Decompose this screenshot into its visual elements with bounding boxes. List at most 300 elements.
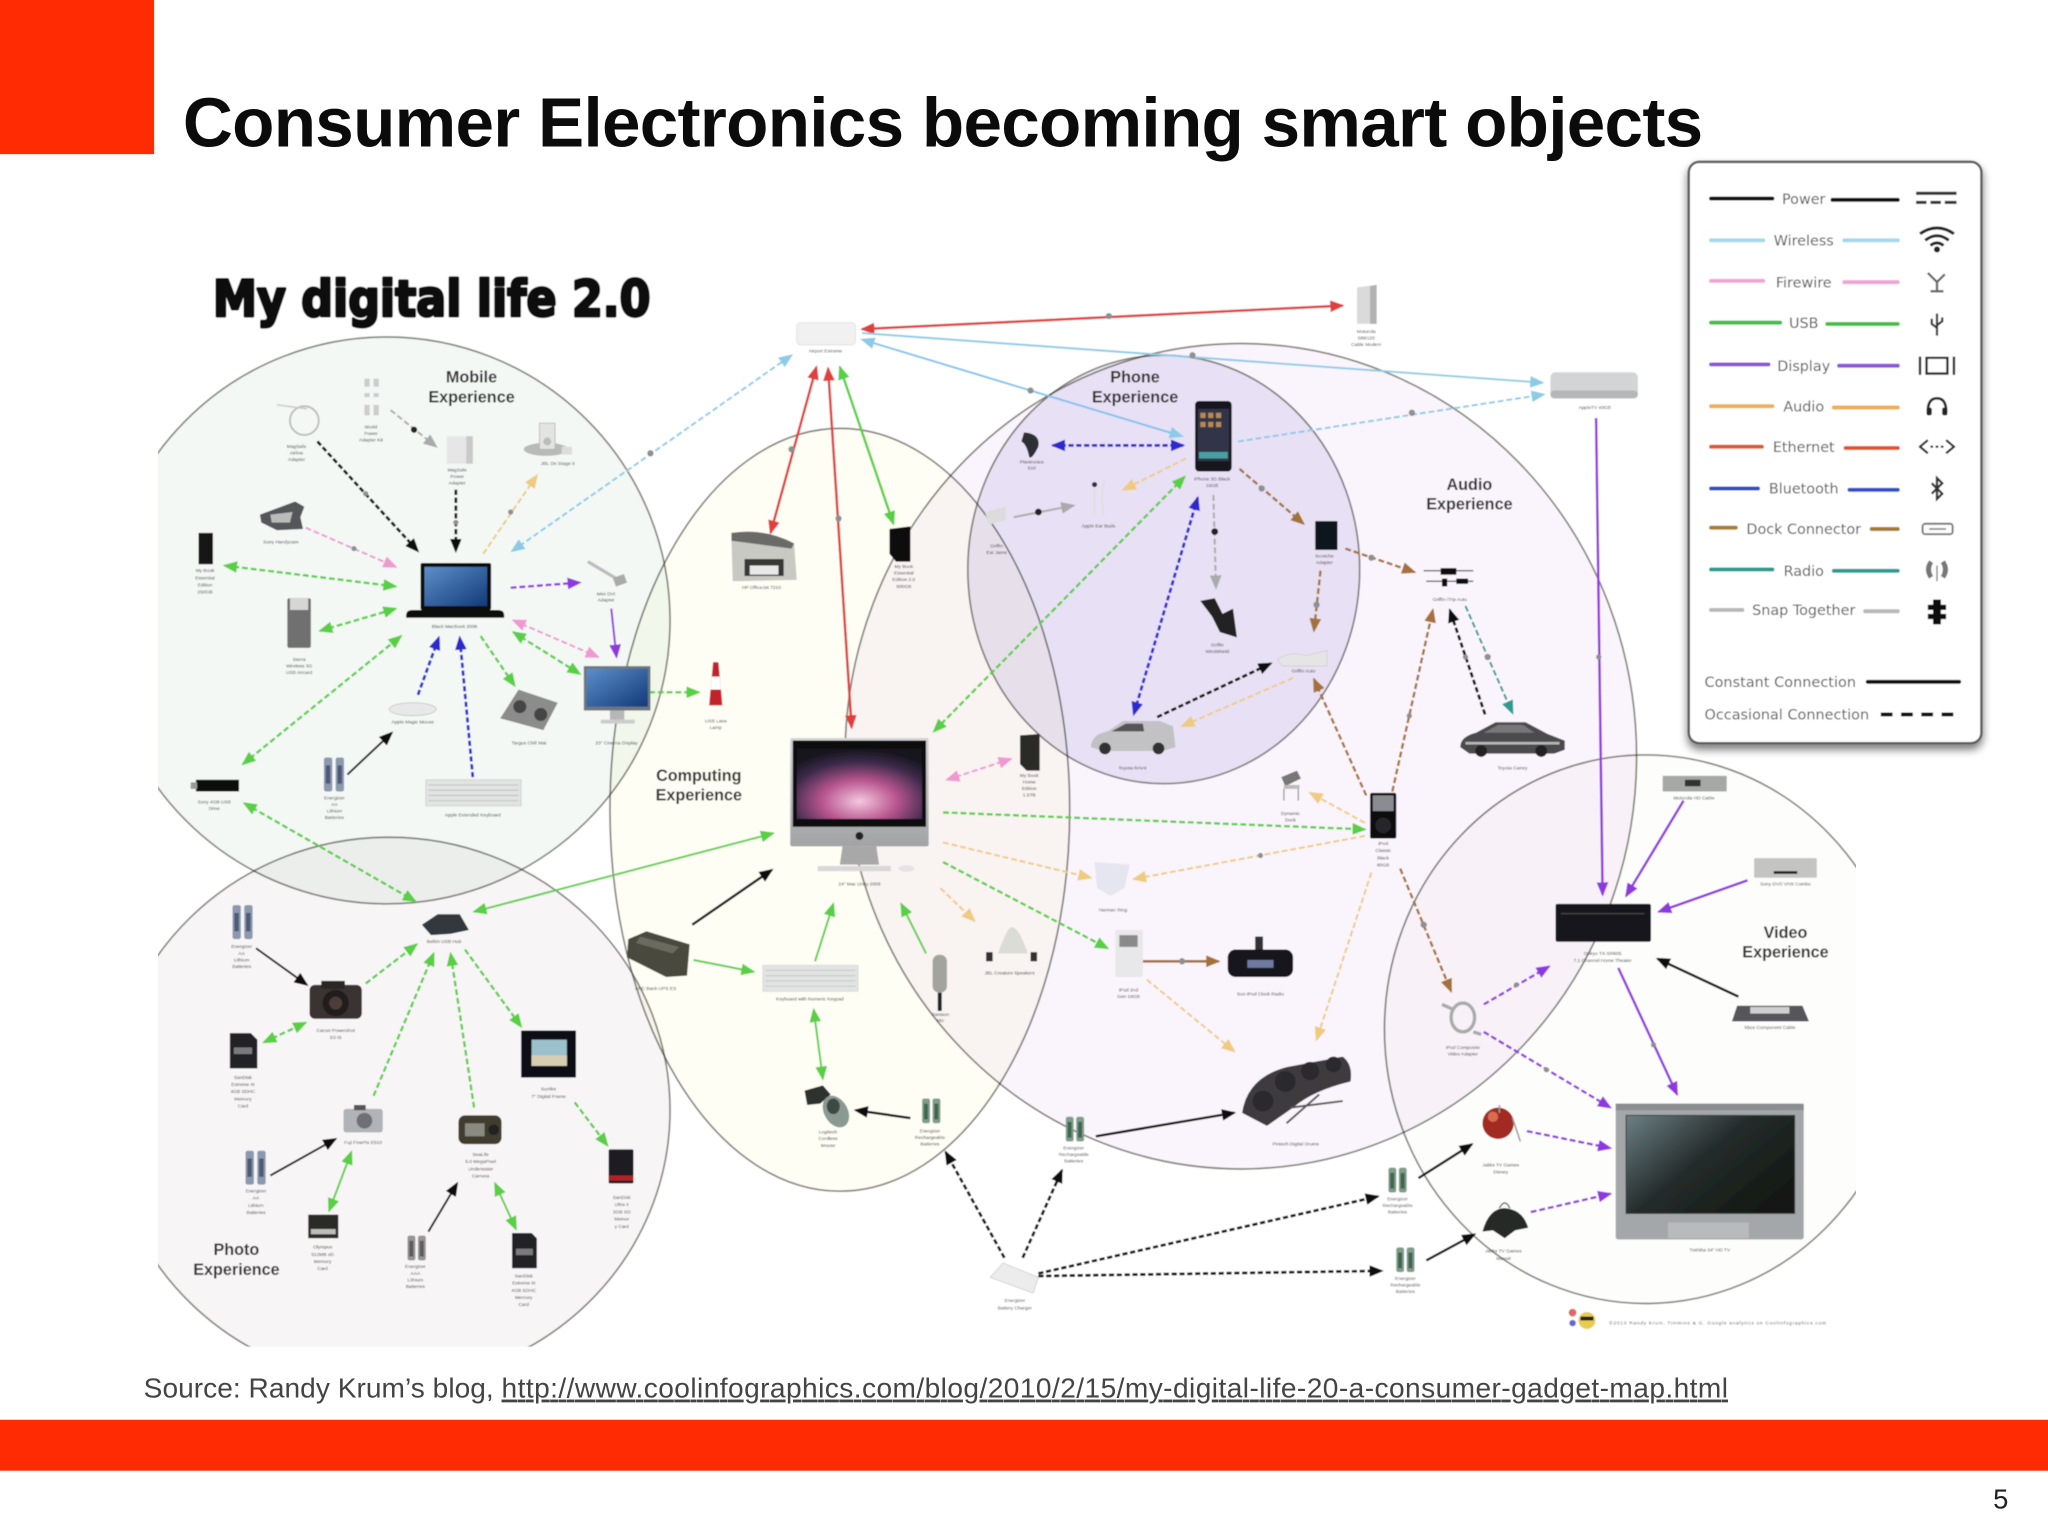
device: my book firewire: 1.5TB	[1023, 793, 1036, 799]
device: world power kit	[359, 379, 384, 443]
device: rechargeable batteries a: Energizer	[920, 1129, 940, 1134]
arrow: scosche to griffin mount	[1314, 571, 1320, 631]
arrow: airline adapter to macbook	[317, 441, 418, 551]
device: batteries mobile: Batteries	[325, 815, 344, 821]
device: xd card: Olympus	[313, 1246, 332, 1251]
arrow: ipod to drums	[1317, 872, 1371, 1040]
device: dvd recorder	[1754, 858, 1817, 888]
arrow: charger to batteries a	[946, 1152, 1004, 1258]
device: numeric keyboard: Keyboard with Numeric Keypad	[776, 996, 844, 1002]
device: magsafe power adapter: MagSafe	[447, 469, 467, 474]
device: extended keyboard	[426, 780, 521, 818]
arrow: ipod to wing speaker	[1134, 836, 1365, 879]
device: battery charger: Energizer	[1005, 1299, 1025, 1304]
device: griffin jack adapter: Ear Jams	[986, 550, 1007, 556]
device: xbox controller: Marvel	[1496, 1256, 1511, 1262]
arrow: magic mouse to macbook	[418, 637, 439, 695]
arrow: iphone to apple tv	[1238, 394, 1544, 441]
credit line	[1569, 1309, 1826, 1329]
device: sd card b: 4GB SDHC	[511, 1288, 537, 1294]
device: apple tv	[1550, 372, 1638, 411]
arrow: world kit to power adapter	[391, 410, 436, 447]
device: printer	[731, 532, 797, 591]
device: my book firewire	[1020, 734, 1040, 799]
device: mini dvi adapter: Adapter	[598, 597, 615, 603]
device: ipod classic: Classic	[1375, 848, 1392, 854]
device: griffin trip	[1424, 568, 1473, 603]
device: scosche adapter	[1315, 521, 1337, 566]
device: usb lava lamp: Lamp	[710, 725, 722, 731]
device: xbox controller: Jakks TV Games	[1485, 1250, 1522, 1255]
device: xd card: Card	[317, 1266, 328, 1272]
device: jbl on stage	[524, 423, 575, 467]
arrow: batteries to drums	[1096, 1113, 1234, 1136]
device: ipod classic: 80GB	[1377, 863, 1389, 869]
device: av receiver: 7.1 Channel Home Theater	[1574, 958, 1632, 964]
device: sony handycam	[260, 502, 304, 545]
device: iphone	[1194, 401, 1232, 489]
arrow: rav4 to griffin	[1157, 664, 1271, 717]
icon: display	[1920, 357, 1954, 375]
legend panel	[1689, 162, 1981, 743]
device: my book drive: My Book	[196, 569, 214, 574]
device: world power kit: World	[365, 425, 377, 430]
arrow: keyboard to macbook	[460, 637, 473, 777]
device: apple tv: AppleTV 40GB	[1579, 405, 1611, 411]
device: apple component cable box	[1732, 1006, 1809, 1031]
device: my book computing: Edition 2.0	[892, 577, 916, 583]
arrow: handycam to macbook	[306, 528, 396, 567]
device: batteries photo c: Energizer	[405, 1265, 426, 1270]
device: my book firewire: My Book	[1020, 774, 1039, 779]
experience circles	[103, 337, 1907, 1383]
device: batteries photo c: Batteries	[406, 1284, 425, 1290]
arrow: xbox to tv	[1531, 1194, 1610, 1212]
arrow: ipod to sonos	[1310, 793, 1365, 823]
device: my book computing: 500GB	[896, 584, 911, 590]
icon: usb	[1932, 313, 1942, 336]
device: my book drive: Essential	[195, 575, 215, 581]
arrow: charger to batteries d	[1038, 1271, 1382, 1276]
arrow: macbook to cinema firewire	[513, 620, 598, 657]
device: rechargeable batteries d	[1390, 1247, 1421, 1295]
device: magsafe power adapter: Power	[450, 474, 464, 480]
device: xd card: Memory	[314, 1259, 332, 1265]
device: cable modem: Cable Modem	[1351, 342, 1381, 348]
arrow: usb drive to macbook	[243, 636, 401, 764]
device: griffin auto	[1277, 650, 1327, 675]
device: batteries photo c	[405, 1236, 426, 1290]
arrow: usb drive to hub	[244, 803, 415, 901]
device: sonos dock: Dock	[1285, 818, 1297, 824]
arrow: hd box to receiver	[1626, 801, 1684, 896]
device: sonos dock	[1281, 771, 1301, 824]
heading: phone experience: Experience	[1092, 388, 1178, 406]
device: airline adapter	[277, 405, 319, 463]
device: headset	[1020, 432, 1044, 472]
arrow: macbook to airport	[512, 355, 792, 551]
arrow: wii to tv	[1527, 1131, 1610, 1148]
device: usb hub	[422, 914, 469, 945]
device: mini dvi adapter	[588, 562, 627, 603]
arrow: imac to ipod	[943, 812, 1365, 829]
device: canon camera: Canon Powershot	[316, 1029, 355, 1034]
circle: audio experience	[845, 344, 1637, 1169]
heading: photo experience: Experience	[193, 1261, 280, 1279]
arrow: ipod nano to drums	[1147, 980, 1234, 1051]
device: iphone: iPhone 3G Black	[1194, 478, 1230, 483]
connections: phone and audio	[934, 445, 1512, 1040]
circle: computing experience	[610, 428, 1070, 1191]
source line: Source: Randy Krum’s blog,	[144, 1373, 494, 1404]
map title: My digital life 2.0	[213, 270, 650, 328]
device: jbl speakers: JBL Creature Speakers	[985, 970, 1035, 976]
device: toyota camry	[1460, 722, 1565, 771]
slide title: Consumer Electronics becoming smart objects	[183, 83, 1703, 161]
legend: wireless: Wireless	[1774, 234, 1834, 250]
device: batteries photo c: AAA	[411, 1271, 421, 1277]
icon: bluetooth	[1932, 478, 1942, 499]
device: my book drive: Edition	[198, 582, 213, 588]
arrow: imac to my book firewire	[947, 759, 1011, 780]
device: cable modem: SB6120	[1358, 336, 1375, 342]
arrow: composite to receiver	[1484, 967, 1549, 1004]
device: av receiver	[1556, 904, 1651, 964]
device: sd card red: Ultra II	[615, 1202, 629, 1208]
device: usb drive: Sony 4GB USB	[198, 800, 231, 805]
icon: ethernet	[1920, 440, 1954, 453]
arrow: batteries to mouse	[347, 733, 392, 775]
device: digital frame	[521, 1031, 576, 1100]
arrow: apple box to receiver	[1657, 959, 1738, 997]
device: griffin trip: Griffin iTrip Auto	[1433, 597, 1467, 603]
arrow: dvd to receiver	[1659, 880, 1748, 912]
legend: power: Power	[1782, 192, 1826, 208]
legend: usb: USB	[1789, 316, 1818, 332]
device: toyota rav4	[1091, 721, 1176, 771]
arrow: ups to imac	[692, 870, 772, 925]
arrow: power adapter to macbook	[455, 490, 457, 551]
icon: firewire	[1928, 273, 1945, 291]
device: ipod classic: iPod	[1378, 842, 1388, 847]
device: printer: HP OfficeJet 7210	[742, 585, 781, 591]
device: sony handycam: Sony Handycam	[263, 539, 299, 545]
device: toyota camry: Toyota Camry	[1498, 765, 1528, 771]
device: batteries mobile: Energizer	[324, 796, 345, 801]
device: magsafe power adapter	[447, 436, 473, 487]
device: hd cable box	[1663, 776, 1727, 801]
device: world power kit: Power	[364, 431, 378, 437]
device: my book computing: My Book	[894, 565, 913, 570]
heading: audio experience: Experience	[1426, 495, 1513, 513]
device: dvd recorder: Sony DVD VHS Combo	[1760, 882, 1811, 888]
device: digital drums	[1242, 1057, 1351, 1147]
device: airline adapter: MagSafe	[287, 445, 306, 450]
arrow: airport to apple tv	[862, 333, 1543, 383]
device: numeric keyboard	[763, 965, 858, 1002]
device: mini dvi adapter: Mini DVI	[597, 593, 615, 598]
device: batteries mobile: Lithium	[327, 808, 342, 814]
device: wii console: Jakks TV Games	[1482, 1163, 1519, 1168]
arrow: scosche to griffin trip	[1345, 549, 1415, 572]
icon: wifi	[1920, 228, 1954, 251]
device: sonos dock: Dynamic	[1281, 812, 1300, 817]
device: magsafe power adapter: Adapter	[449, 481, 466, 487]
circle: phone experience	[968, 355, 1360, 784]
device: microphone: Mic	[937, 1018, 945, 1024]
device: my book firewire: Edition	[1022, 786, 1037, 792]
device: sd card red: Memor	[614, 1217, 630, 1223]
arrow: airport to iphone	[862, 340, 1182, 436]
device: batteries photo b: Energizer	[246, 1189, 266, 1194]
icon: dock connector	[1923, 524, 1953, 534]
device: logitech mouse: Cordless	[819, 1136, 838, 1142]
device: digital drums: Pintech Digital Drums	[1272, 1141, 1319, 1147]
device: logitech mouse: Mouse	[821, 1143, 836, 1149]
device: sealife camera	[458, 1115, 502, 1179]
source line: http://www.coolinfographics.com/blog/2010/2/15/my-digital-life-20-a-consumer-gadget-map.html	[502, 1373, 1728, 1404]
page number: 5	[1993, 1484, 2008, 1515]
device: airport express: Airport Extreme	[809, 349, 843, 355]
device: digital frame: 7" Digital Frame	[531, 1094, 566, 1100]
arrow: imac to speakers	[940, 888, 974, 921]
device: rechargeable batteries b	[1059, 1117, 1089, 1164]
arrow: keyboard to imac	[815, 904, 833, 961]
device: rechargeable batteries c	[1383, 1168, 1413, 1215]
legend: radio: Radio	[1784, 564, 1824, 580]
arrow: batteries to xbox	[1426, 1234, 1475, 1260]
arrow: iphone to scosche adapter	[1240, 469, 1304, 524]
device: griffin jack adapter: Griffin	[990, 544, 1003, 549]
device: batteries photo b: Lithium	[248, 1203, 264, 1209]
device: wireless aircard	[286, 598, 313, 676]
device: windshield mount: Windshield	[1205, 649, 1229, 655]
device: batteries photo b: AA	[253, 1196, 260, 1202]
device: my book computing: Essential	[894, 571, 914, 577]
device: imac	[790, 738, 929, 888]
arrow: camry to griffin trip	[1450, 610, 1485, 714]
arrow: airport to imac	[828, 368, 852, 728]
arrow: receiver to tv	[1618, 968, 1677, 1095]
icon: radio	[1926, 560, 1948, 581]
red corner block	[0, 0, 154, 154]
device: usb lava lamp	[705, 662, 727, 731]
icon: power	[1916, 193, 1957, 202]
device: world power kit: Adapter Kit	[359, 437, 384, 443]
device: battery charger	[990, 1263, 1038, 1311]
legend: display: Display	[1777, 359, 1831, 375]
device: cable modem	[1351, 285, 1381, 348]
arrow: airport to printer	[771, 367, 816, 533]
device: griffin jack adapter	[985, 507, 1007, 556]
device: my book firewire: Home	[1023, 780, 1036, 786]
device: jbl on stage: JBL On Stage II	[541, 461, 575, 467]
device: rechargeable batteries a	[915, 1098, 945, 1147]
device: earbuds: Apple Ear Buds	[1082, 524, 1116, 530]
arrow: macbook to jbl	[483, 475, 537, 554]
device: apple component cable box: Xbox Component Cable	[1744, 1025, 1796, 1031]
arrow: keyboard to mouse	[814, 1010, 823, 1079]
device: sd card red: y Card	[615, 1224, 629, 1230]
device: av receiver: Onkyo TX-SR605	[1584, 952, 1621, 957]
arrow: macbook to chill mat	[481, 636, 515, 686]
arrow: macbook to cinema usb	[513, 632, 580, 674]
connections: mobile	[225, 355, 792, 901]
device: batteries photo a: AA	[238, 951, 246, 957]
legend: firewire: Firewire	[1776, 275, 1832, 291]
circle: mobile experience	[103, 337, 670, 904]
arrow: imac to wing speaker	[943, 842, 1091, 878]
device: batteries photo b	[246, 1151, 267, 1216]
device: xbox controller	[1482, 1203, 1528, 1262]
device: sealife camera: Underwater	[468, 1166, 494, 1172]
heading: computing experience: Computing	[656, 767, 741, 785]
device: sd card a: Memory	[234, 1096, 252, 1102]
device: rechargeable batteries d: Batteries	[1396, 1289, 1415, 1295]
device: dock radio: Sun iPod Clock Radio	[1237, 991, 1284, 997]
device: microphone	[932, 955, 950, 1024]
device: composite video adapter: Video Adapter	[1448, 1051, 1478, 1057]
device: sd card b	[511, 1233, 537, 1308]
arrow: apple tv to receiver	[1596, 418, 1603, 895]
arrow: airport to my book	[840, 367, 893, 524]
device: my book drive: 250GB	[198, 590, 213, 596]
arrow: airport to modem	[862, 306, 1343, 329]
arrow: canon to hub	[366, 944, 417, 984]
device: usb lava lamp: USB Lava	[705, 719, 727, 724]
arrow: cinema to lamp	[649, 691, 699, 693]
device: magic mouse	[389, 703, 436, 726]
device: rechargeable batteries a: Rechargeable	[915, 1135, 945, 1141]
device: rechargeable batteries d: Rechargeable	[1390, 1283, 1421, 1289]
device: sealife camera: 5.0 MegaPixel	[465, 1159, 496, 1165]
device: airline adapter: Airline	[290, 451, 304, 457]
device: cinema display	[584, 666, 650, 746]
arrow: ipod to griffin	[1314, 679, 1366, 795]
arrow: hub to imac	[474, 833, 773, 912]
arrow: macbook to mini dvi	[511, 583, 580, 588]
device: rechargeable batteries b: Energizer	[1063, 1146, 1084, 1151]
device: canon camera: S3 IS	[330, 1035, 342, 1041]
device: rechargeable batteries c: Batteries	[1388, 1209, 1408, 1215]
credit line: ©2010 Randy Krum, Timmins & G. Google analytics on CoolInfographics.com	[1609, 1319, 1826, 1326]
arrow: charger to batteries b	[1023, 1170, 1062, 1258]
device: headset: Plantronics	[1020, 461, 1044, 466]
device: sealife camera: SeaLife	[472, 1153, 489, 1158]
device: fuji camera	[344, 1105, 383, 1146]
legend: occasional connection: Occasional Connection	[1704, 708, 1869, 724]
icon: snap	[1928, 600, 1946, 624]
arrow: headset to iphone	[1053, 444, 1183, 446]
arrow: jack adapter to earbuds	[1014, 505, 1074, 517]
device: hd cable box: Motorola HD Cable	[1674, 795, 1715, 801]
device: earbuds	[1082, 481, 1116, 530]
device: sd card b: Memory	[515, 1295, 533, 1301]
device: batteries photo a	[231, 905, 253, 970]
device: sealife camera: Camera	[472, 1173, 490, 1179]
device: wii console: Disney	[1493, 1170, 1509, 1176]
device: airline adapter: Adapter	[288, 457, 305, 463]
device: batteries photo a: Batteries	[232, 964, 252, 970]
arrow: microphone to imac	[901, 904, 926, 953]
heading: photo experience: Photo	[213, 1241, 259, 1259]
device: wii console	[1482, 1105, 1520, 1176]
device: sd card b: Card	[519, 1302, 529, 1308]
device: ipod nano: iPod 2nd	[1119, 988, 1138, 993]
device: scosche adapter: Adapter	[1316, 560, 1333, 566]
arrow: ipod to composite adapter	[1400, 869, 1451, 991]
arrow: ipod to griffin trip	[1392, 610, 1433, 792]
device: jbl speakers	[985, 927, 1037, 976]
device: windshield mount: Griffin	[1211, 644, 1224, 649]
arrow: iphone to imac	[934, 477, 1185, 731]
device: digital frame: Sunfire	[541, 1088, 556, 1093]
connections: video	[1418, 418, 1748, 1260]
device: macbook: Black MacBook 2006	[432, 624, 478, 630]
arrow: my book to macbook	[225, 566, 396, 586]
device: rechargeable batteries a: Batteries	[920, 1141, 940, 1147]
device: batteries photo a: Lithium	[234, 957, 249, 963]
legend: ethernet: Ethernet	[1773, 440, 1835, 456]
device: sd card red: SanDisk	[613, 1196, 631, 1201]
arrow: iphone to rav4	[1134, 498, 1198, 714]
legend: audio: Audio	[1783, 399, 1824, 415]
device: sd card a: 4GB SDHC	[231, 1089, 256, 1095]
device: sd card a: Extreme III	[231, 1082, 255, 1088]
device: batteries photo b: Batteries	[246, 1210, 266, 1216]
arrow: griffin to rav4	[1182, 678, 1293, 726]
device: iphone: 16GB	[1206, 483, 1218, 489]
device: xd card	[308, 1215, 338, 1272]
device: sd card red: 2GB SD	[613, 1209, 631, 1215]
device: wing speaker	[1095, 862, 1130, 914]
arrow: hub to frame	[465, 950, 521, 1027]
device: usb hub: Belkin USB Hub	[427, 939, 462, 945]
device: sd card red	[609, 1149, 633, 1230]
device: griffin auto: Griffin Auto	[1292, 669, 1316, 675]
device: chill mat	[500, 690, 558, 746]
device: ups battery: APC Back-UPS ES	[635, 986, 676, 992]
arrow: sealife to sd card	[495, 1183, 516, 1229]
device: cinema display: 23" Cinema Display	[595, 740, 638, 746]
red footer band	[0, 1420, 2048, 1471]
device: rechargeable batteries d: Energizer	[1395, 1277, 1416, 1282]
arrow: iphone to earbuds	[1123, 458, 1186, 490]
device: scosche adapter: Scosche	[1315, 555, 1334, 560]
device: windshield mount	[1200, 598, 1237, 655]
icon: headphones	[1927, 398, 1947, 415]
device: rechargeable batteries c: Rechargeable	[1383, 1203, 1413, 1209]
device: headset: 510	[1028, 466, 1036, 472]
arrow: batteries to canon	[256, 948, 307, 985]
device: rechargeable batteries b: Rechargeable	[1059, 1152, 1089, 1158]
device: wireless aircard: USB Aircard	[286, 670, 313, 676]
device: microphone: Samson	[932, 1013, 949, 1018]
arrow: ipod nano to dock radio	[1143, 960, 1219, 962]
arrow: batteries to fuji	[270, 1139, 336, 1176]
connector type badges on lines	[351, 313, 1656, 1072]
legend: snap together: Snap Together	[1752, 603, 1855, 619]
arrow: iphone to windshield mount	[1213, 495, 1216, 588]
device: tv	[1616, 1104, 1804, 1253]
heading: video experience: Experience	[1742, 943, 1829, 961]
device: rechargeable batteries c: Energizer	[1387, 1197, 1408, 1202]
device: batteries photo c: Lithium	[408, 1277, 423, 1283]
device: composite video adapter: iPod Composite	[1446, 1046, 1480, 1051]
device: cable modem: Motorola	[1357, 330, 1376, 335]
circle: video experience	[1384, 755, 1907, 1304]
device: xd card: 512MB xD	[311, 1252, 334, 1258]
